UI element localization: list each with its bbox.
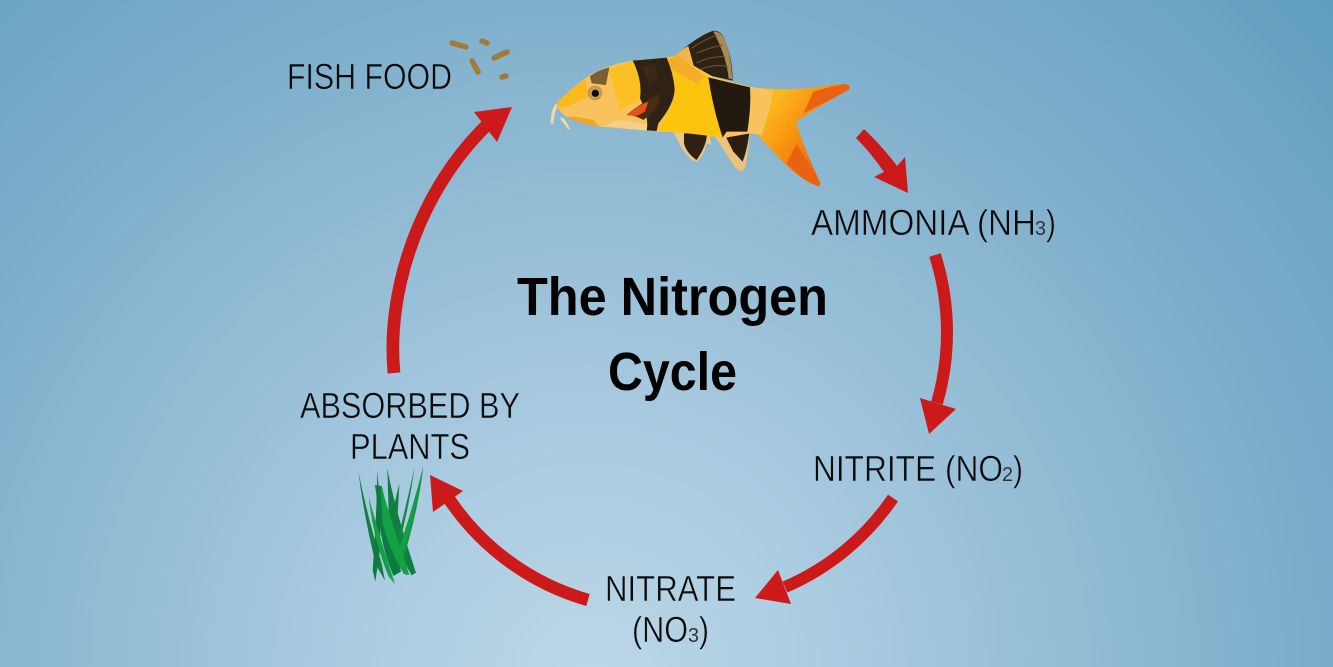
band 2 — [708, 77, 750, 137]
head markings — [556, 79, 588, 107]
arrow: fish to ammonia — [856, 129, 908, 193]
label: absorbed by plants — [300, 385, 520, 467]
icon: fish food pellets — [452, 41, 507, 77]
label: nitrate — [605, 568, 736, 650]
arrow: plants to fish food — [393, 107, 512, 373]
ventral fin — [672, 130, 712, 162]
label: nitrate: NITRATE — [605, 568, 736, 609]
label: nitrite: NITRITE (NO — [813, 448, 1003, 489]
label: fish food: FISH FOOD — [287, 56, 452, 97]
body — [556, 55, 773, 138]
dorsal fin — [675, 31, 733, 81]
label: ammonia: AMMONIA (NH — [811, 202, 1036, 243]
label: nitrite: 2 — [1002, 464, 1013, 486]
label: nitrate: ) — [699, 609, 709, 650]
band 1 — [633, 58, 675, 131]
yellow band — [657, 55, 723, 137]
label: nitrate: 3 — [688, 625, 699, 647]
title: The Nitrogen — [517, 267, 828, 327]
icon: fish — [551, 31, 850, 186]
label: ammonia: ) — [1046, 202, 1056, 243]
label: ammonia: 3 — [1035, 218, 1046, 240]
arrow: ammonia to nitrite — [920, 255, 956, 434]
icon: plant — [358, 466, 423, 584]
arrow: nitrite to nitrate — [755, 498, 893, 604]
barbels — [551, 103, 557, 124]
title — [517, 267, 828, 402]
label: absorbed by plants: PLANTS — [350, 426, 470, 467]
eye — [588, 86, 602, 100]
label: absorbed by plants: ABSORBED BY — [300, 385, 520, 426]
title: Cycle — [608, 342, 737, 402]
anal fin — [715, 132, 750, 172]
label: nitrite: ) — [1013, 448, 1023, 489]
pectoral fin — [627, 94, 660, 120]
label: nitrate: (NO — [632, 609, 688, 650]
arrow: nitrate to plants — [430, 475, 588, 600]
tail — [757, 84, 850, 186]
